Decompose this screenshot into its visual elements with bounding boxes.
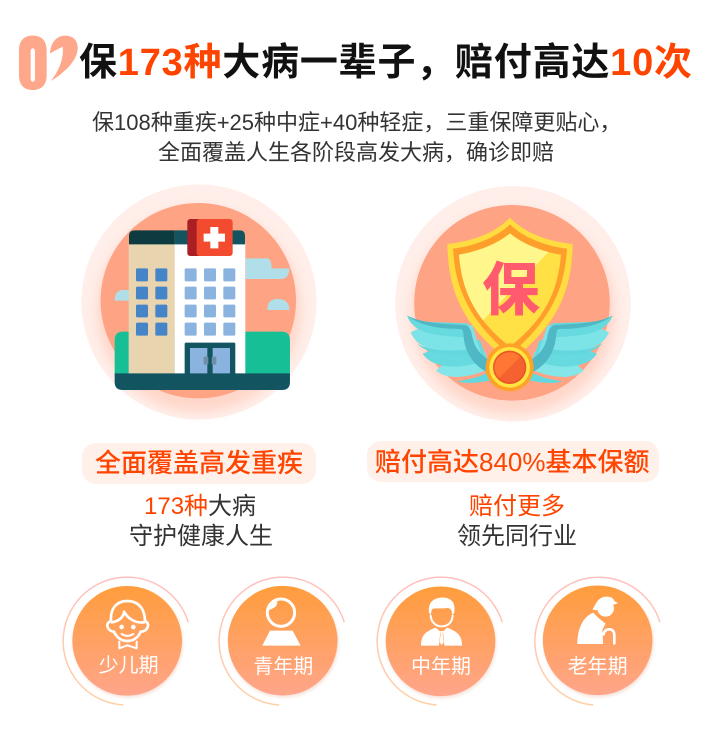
icon: medal <box>486 343 534 391</box>
icon: hospital building <box>115 219 290 390</box>
panel: middle age <box>377 577 502 705</box>
panel: childhood <box>63 577 188 705</box>
icon: child <box>107 601 148 648</box>
panel: left feature text: 全面覆盖高发重疾 <box>95 448 303 478</box>
panel: right feature text <box>367 441 659 550</box>
panel: youth <box>219 577 344 705</box>
panel: left feature text: 173种大病 <box>144 493 256 520</box>
label: 老年期 <box>568 655 628 678</box>
panel: left feature text: 守护健康人生 <box>129 523 273 550</box>
panel: right feature text: 赔付高达840%基本保额 <box>375 447 650 477</box>
panel: left feature text <box>82 443 316 550</box>
title: 保173种大病一辈子，赔付高达10次 <box>79 42 692 84</box>
shield character: 保 <box>483 259 540 322</box>
icon: elderly person with cane <box>577 597 618 644</box>
panel: shield illustration <box>395 186 631 421</box>
subtitle <box>92 110 621 165</box>
panel: right feature text: 赔付更多 <box>469 493 565 520</box>
label: 中年期 <box>411 655 471 678</box>
icon: middle-aged man <box>421 598 462 646</box>
label: 青年期 <box>253 655 313 678</box>
icon: shield with wings <box>407 218 613 391</box>
panel: right feature text: 领先同行业 <box>457 523 577 550</box>
section number 02 <box>19 36 78 90</box>
subtitle: 保108种重疾+25种中症+40种轻症，三重保障更贴心， <box>92 110 621 135</box>
panel: hospital illustration <box>82 184 316 420</box>
panel: old age <box>535 577 660 705</box>
label: 少儿期 <box>99 654 159 677</box>
icon: young person <box>262 599 301 646</box>
subtitle: 全面覆盖人生各阶段高发大病，确诊即赔 <box>158 140 554 165</box>
